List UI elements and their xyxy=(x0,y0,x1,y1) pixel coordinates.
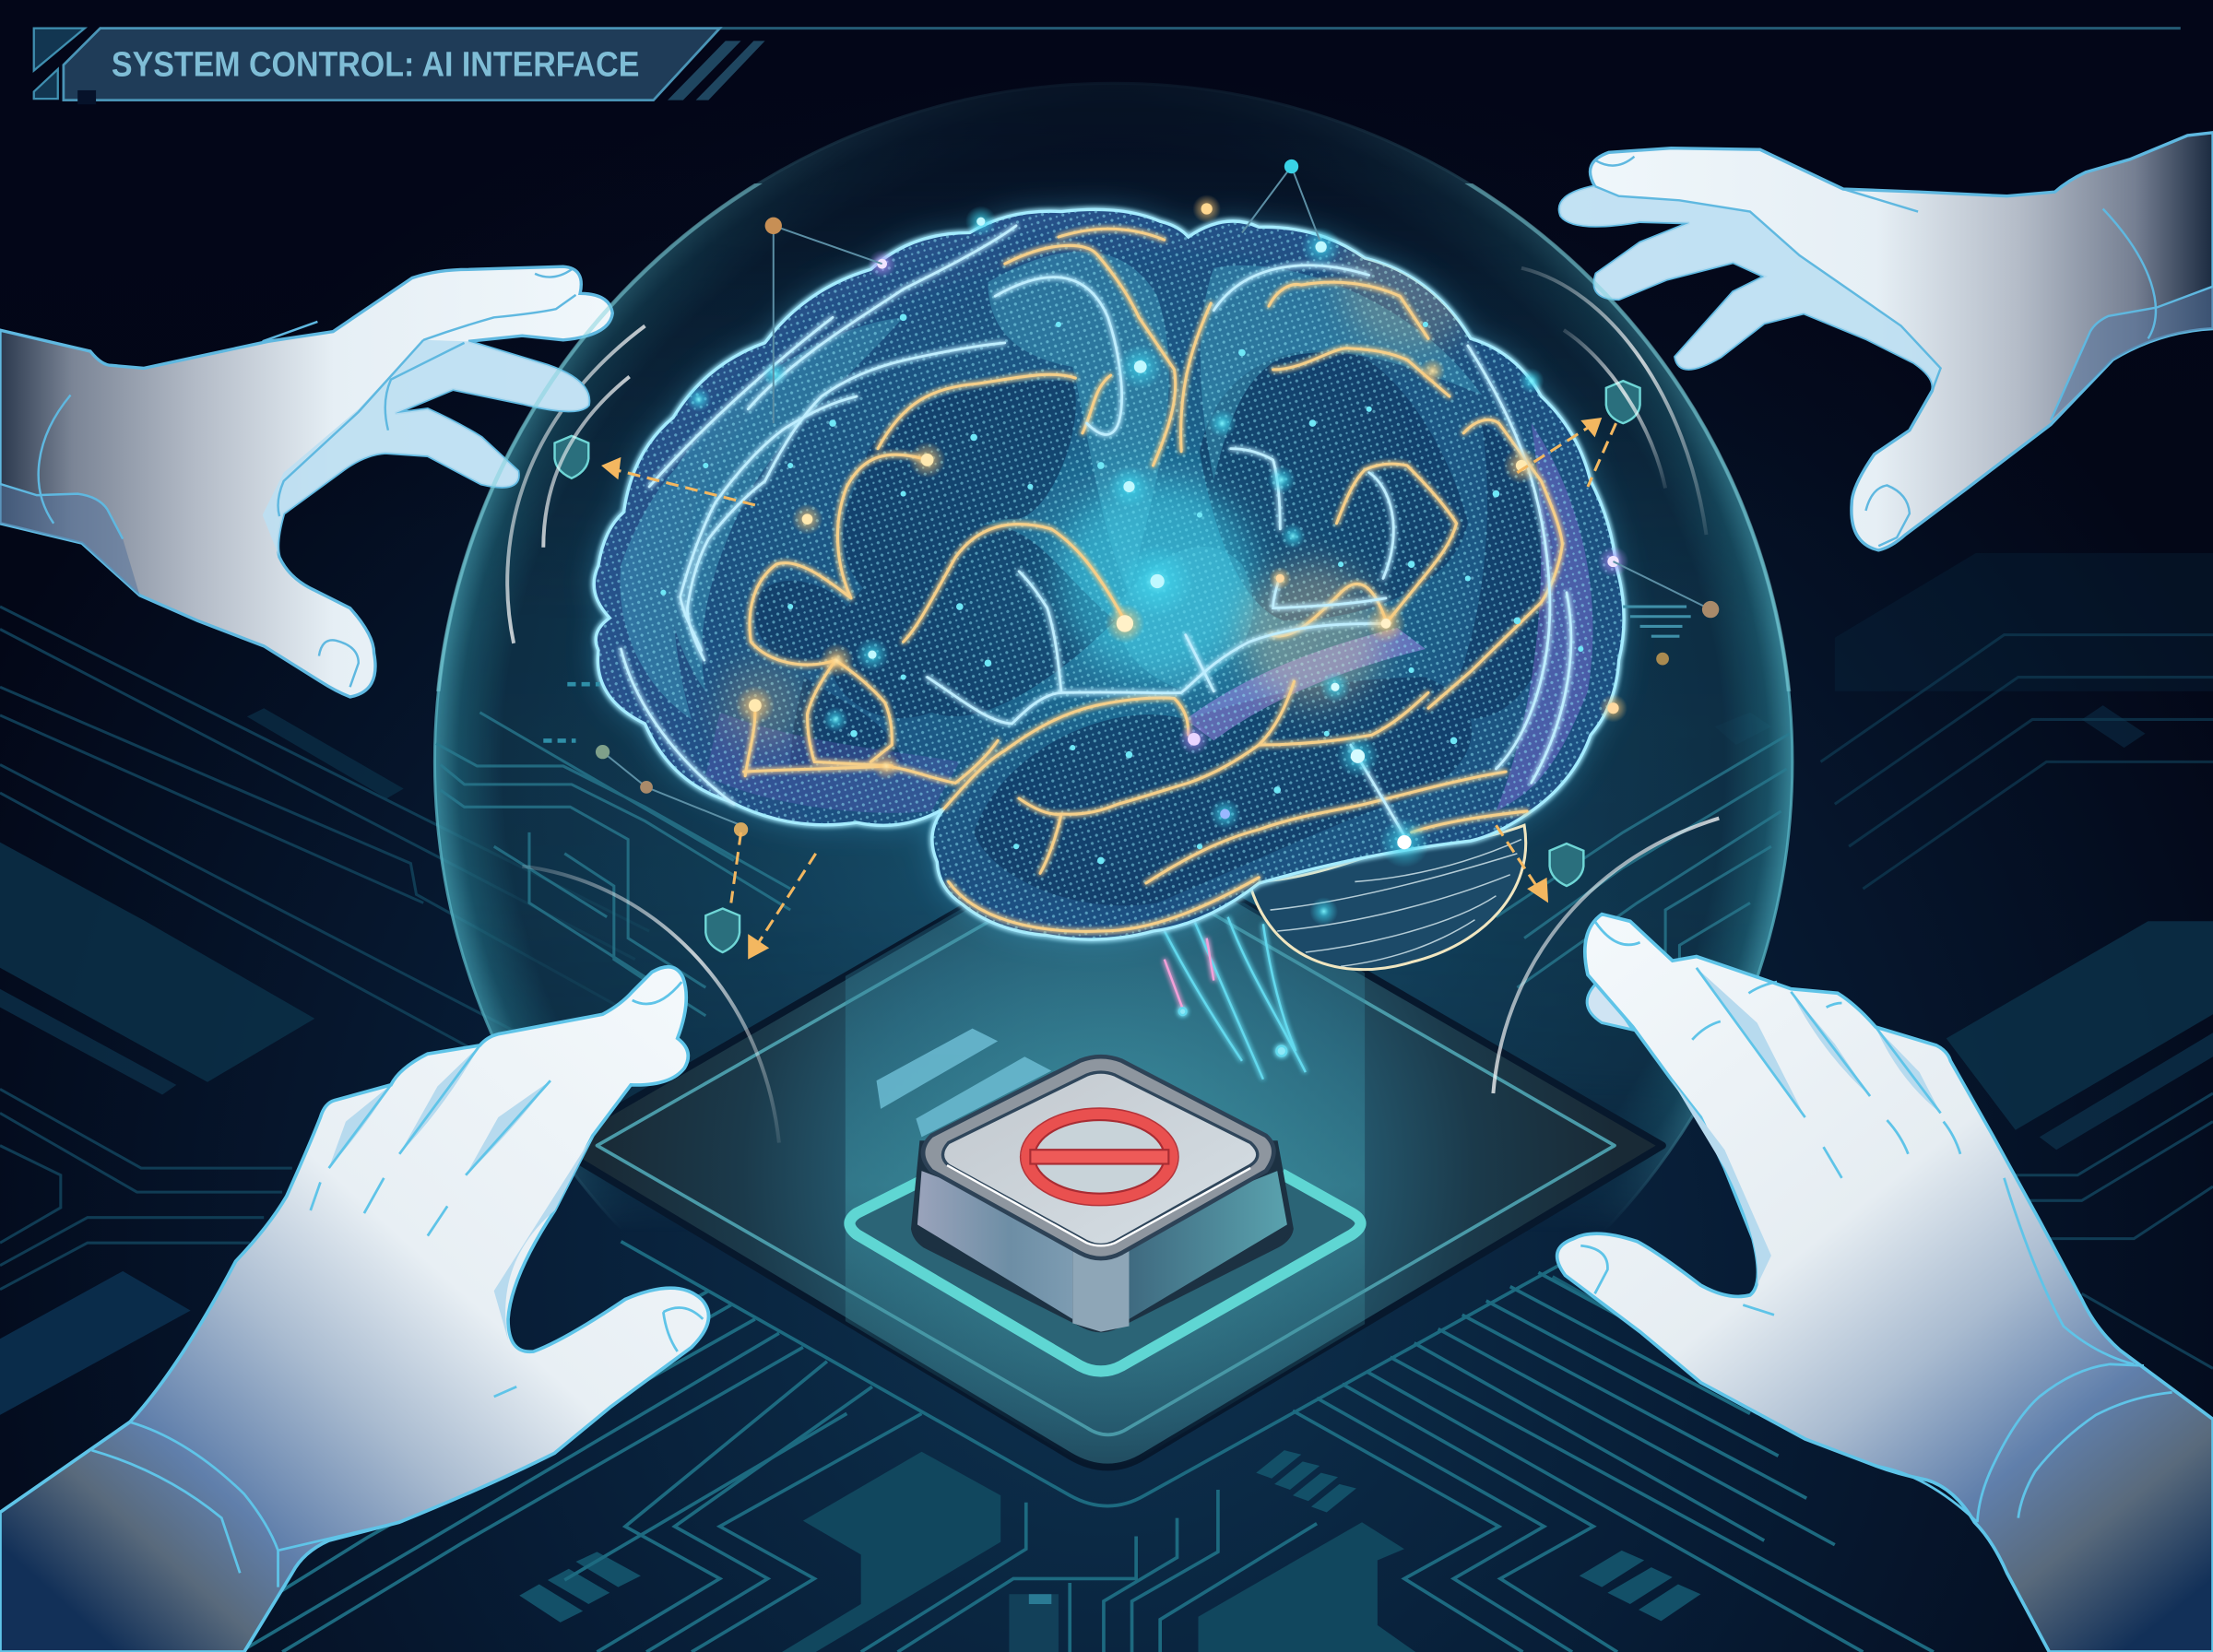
motion arcs xyxy=(507,268,1719,1143)
corner mark xyxy=(34,29,85,99)
brain xyxy=(586,195,1630,970)
hand: top left xyxy=(0,266,612,697)
brainstem xyxy=(1157,917,1306,1080)
stop button xyxy=(913,1056,1292,1332)
red stop symbol xyxy=(1021,1108,1178,1206)
banner stripes xyxy=(668,41,765,100)
dome rim over fingertips xyxy=(434,83,1793,1440)
brain nodes xyxy=(686,195,1628,926)
button body xyxy=(913,1143,1292,1330)
scattered signal dots xyxy=(660,313,1583,864)
banner notch xyxy=(77,90,96,104)
chip platform xyxy=(579,898,1666,1471)
top rule xyxy=(720,28,2181,30)
cerebrum body xyxy=(594,209,1624,939)
header banner xyxy=(34,29,2181,104)
circuit board blocks xyxy=(0,553,2213,1652)
hand: bottom left xyxy=(0,967,709,1652)
light beam xyxy=(846,903,1365,1468)
circuit traces inside dome xyxy=(436,713,1790,1016)
banner title: SYSTEM CONTROL: AI INTERFACE xyxy=(112,45,639,85)
cerebellum xyxy=(1249,825,1526,970)
banner plate xyxy=(64,29,720,100)
gold dashed arrows xyxy=(601,418,1616,960)
button top xyxy=(923,1056,1273,1258)
white and cyan folds xyxy=(621,226,1571,841)
hand: top right xyxy=(1559,133,2213,550)
core glow xyxy=(1059,479,1256,678)
gold folds xyxy=(744,229,1562,931)
stop button base ring xyxy=(849,1174,1361,1371)
shield icons xyxy=(555,381,1640,952)
external node network xyxy=(543,159,1719,836)
neural stipple xyxy=(586,197,1630,960)
circuit board traces: left and right xyxy=(0,607,2213,1368)
button plate xyxy=(942,1072,1258,1245)
brain halo xyxy=(594,209,1624,939)
glass dome xyxy=(433,82,1794,1221)
highlight bars xyxy=(877,1029,1051,1137)
hand: bottom right xyxy=(1557,914,2213,1652)
circuit board traces: bottom xyxy=(183,1242,1934,1652)
gyri shading xyxy=(754,350,1556,905)
purple edge tint xyxy=(1496,423,1592,811)
